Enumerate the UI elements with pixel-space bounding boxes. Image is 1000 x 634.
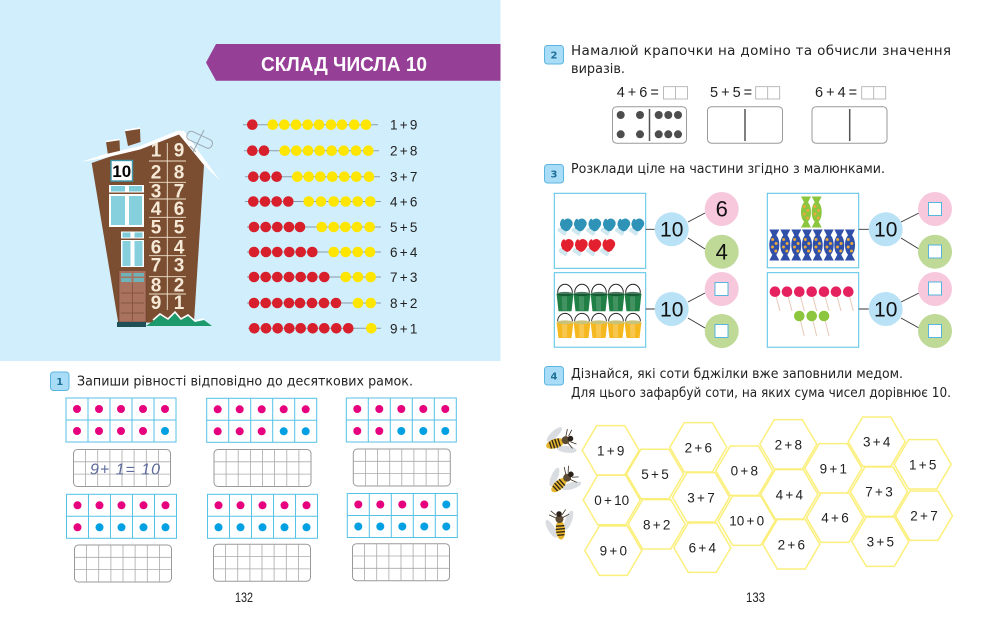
cell 0 + 8 (716, 446, 773, 495)
number pairs on the facade (149, 141, 186, 314)
number pairs on the facade: 5 (174, 218, 185, 238)
cell 2 + 6: 2 + 6 (685, 440, 712, 455)
beads 8 + 2: 8 + 2 (390, 296, 417, 311)
cell 5 + 5 (626, 449, 684, 499)
beads 5 + 5: 5 + 5 (390, 220, 417, 235)
page number left: 132 (235, 589, 253, 605)
cell 3 + 4: 3 + 4 (863, 435, 891, 450)
cell 9 + 1 (805, 444, 862, 493)
equation 4 + 6 (617, 85, 688, 101)
icon: bee 1 (541, 422, 579, 462)
number pairs on the facade: 7 (174, 181, 184, 202)
beads 1 + 9: 1 + 9 (390, 118, 417, 133)
cell 2 + 7: 2 + 7 (910, 509, 938, 524)
beads 3 + 7 (245, 170, 417, 185)
number pairs on the facade: 5 (151, 218, 162, 238)
ten frame: 5 + 5 (208, 494, 318, 538)
cell 4 + 4 (761, 470, 818, 519)
panel: buckets frame (554, 273, 646, 347)
domino: empty 5 + 5 (708, 107, 782, 143)
equation 6 + 4: 6 + 4 = (815, 85, 857, 101)
task 1 text: Запиши рівності відповідно до десяткових рамок. (77, 374, 413, 390)
number pairs on the facade: 7 (151, 256, 161, 277)
bush with snow (146, 312, 212, 326)
answer grid with handwritten equation (74, 450, 170, 486)
number pairs on the facade: 6 (151, 237, 161, 258)
cell 2 + 6 (670, 423, 727, 472)
title: СКЛАД ЧИСЛА 10 (261, 54, 427, 76)
ten frame: 6 + 4 (66, 494, 176, 538)
task 2 text: виразів. (571, 61, 625, 77)
cell 2 + 8: 2 + 8 (775, 437, 802, 452)
task 4 text: Для цього зафарбуй соти, на яких сума чисел дорівнює 10. (571, 385, 951, 401)
beads 2 + 8 (244, 144, 417, 159)
panel: mittens frame (554, 193, 646, 268)
panel: candies frame (767, 193, 859, 268)
answer grid 3 (353, 449, 450, 486)
cell 0 + 10: 0 + 10 (594, 493, 629, 508)
cell 8 + 2: 8 + 2 (643, 517, 670, 532)
beads 7 + 3 (247, 270, 417, 285)
split diagram: buckets (646, 272, 739, 348)
ten frame: 9 + 1 (66, 398, 176, 442)
beads 8 + 2 (247, 296, 417, 311)
badge: task 1 (50, 372, 69, 390)
ten frame: 7 + 3 (346, 398, 456, 442)
beads 1 + 9 (243, 118, 417, 133)
number pairs on the facade: 2 (174, 276, 184, 297)
domino: empty 6 + 4 (812, 107, 887, 143)
panel: lollipops frame (767, 273, 859, 347)
beads 5 + 5 (247, 220, 417, 235)
task 4 text (571, 366, 951, 401)
cell 9 + 0 (585, 526, 642, 575)
number pairs on the facade: 1 (174, 293, 185, 314)
cell 7 + 3: 7 + 3 (865, 485, 893, 500)
equation 6 + 4 (815, 85, 886, 101)
banner: title ribbon (206, 44, 500, 81)
task 4 text: Дізнайся, які соти бджілки вже заповнили медом. (571, 366, 903, 382)
cell 8 + 2 (628, 500, 685, 549)
number pairs on the facade: 3 (174, 256, 184, 277)
cell 9 + 1: 9 + 1 (820, 461, 847, 476)
chimneys (106, 128, 140, 155)
cell 3 + 4 (848, 417, 905, 466)
answer grid with handwritten equation: 9+ 1= 10 (90, 462, 160, 478)
small window (121, 232, 144, 267)
number pairs on the facade: 4 (174, 237, 185, 258)
task 2 text: Намалюй крапочки на доміно та обчисли значення (571, 43, 951, 59)
badge: task 4: 4 (551, 372, 558, 382)
cell 2 + 7 (896, 491, 952, 540)
beads 4 + 6: 4 + 6 (390, 194, 417, 210)
domino: 4 and 6 dots (612, 107, 686, 143)
badge: task 1: 1 (56, 377, 63, 388)
answer grid 5 (214, 544, 310, 581)
ten frame: 8 + 2 (207, 398, 317, 442)
cell 2 + 6 lower (763, 520, 820, 569)
beads 2 + 8: 2 + 8 (390, 144, 417, 159)
cell 7 + 3 (850, 467, 908, 516)
cell 3 + 7 (672, 473, 730, 522)
badge: task 3 (544, 164, 564, 183)
cell 1 + 5 (894, 440, 951, 489)
cell 6 + 4 (674, 523, 731, 572)
equation 4 + 6: 4 + 6 = (617, 85, 659, 101)
badge: task 2 (544, 46, 564, 64)
cell 9 + 0: 9 + 0 (600, 544, 627, 559)
illustration: house of number 10 (82, 128, 220, 327)
equation 5 + 5 (710, 85, 780, 101)
number pairs on the facade: 8 (174, 162, 184, 183)
answer grid 4 (74, 545, 172, 582)
beads 4 + 6 (245, 194, 417, 210)
cell 1 + 9: 1 + 9 (597, 443, 624, 458)
split diagram: buckets: 10 (660, 298, 683, 322)
page number right: 133 (746, 589, 765, 605)
answer grid 6 (352, 544, 450, 581)
number pairs on the facade: 6 (174, 199, 184, 220)
house body (92, 133, 204, 323)
split diagram: 10 = 6 + 4: 4 (716, 240, 728, 264)
cell 1 + 5: 1 + 5 (909, 457, 936, 472)
cell 0 + 8: 0 + 8 (731, 464, 758, 479)
icon: bee 3 (542, 509, 578, 541)
badge: task 2: 2 (551, 50, 558, 62)
split diagram: 10 = 6 + 4: 10 (660, 218, 683, 242)
cell 3 + 7: 3 + 7 (687, 490, 715, 505)
cell 10 + 0: 10 + 0 (729, 514, 764, 529)
split diagram: candies: 10 (874, 218, 897, 242)
cell 5 + 5: 5 + 5 (641, 467, 669, 482)
foundation (117, 322, 146, 327)
door (119, 270, 146, 322)
split diagram: 10 = 6 + 4 (646, 192, 739, 269)
honeycomb of sums (582, 417, 952, 575)
cell 1 + 9 (582, 426, 639, 475)
split diagram: 10 = 6 + 4: 6 (716, 196, 728, 222)
big window (109, 185, 144, 227)
answer grid 2 (214, 450, 311, 486)
house number plate: 10 (112, 162, 131, 181)
cell 4 + 4: 4 + 4 (776, 487, 803, 502)
cell 10 + 0 (718, 496, 775, 545)
cell 0 + 10 (583, 475, 640, 525)
beads 9 + 1: 9 + 1 (390, 321, 417, 336)
number pairs on the facade: 9 (151, 293, 161, 314)
panel: blue header background (0, 0, 500, 361)
cell 4 + 6 (806, 493, 864, 542)
number pairs on the facade: 3 (151, 181, 161, 202)
beads 7 + 3: 7 + 3 (390, 270, 417, 285)
cell 2 + 8 (760, 420, 817, 469)
number pairs on the facade: 8 (151, 276, 161, 297)
cell 4 + 6: 4 + 6 (821, 511, 849, 526)
split diagram: candies (859, 192, 952, 269)
number pairs on the facade: 1 (151, 141, 162, 162)
beads 3 + 7: 3 + 7 (390, 170, 417, 185)
badge: task 4 (544, 366, 564, 385)
antenna (186, 130, 214, 152)
icon: bee 2 (541, 460, 585, 504)
beads 6 + 4: 6 + 4 (390, 245, 418, 260)
cell 6 + 4: 6 + 4 (689, 541, 716, 556)
ten frame: 4 + 6 (347, 494, 457, 538)
equation 5 + 5: 5 + 5 = (710, 85, 752, 101)
cell 3 + 5: 3 + 5 (867, 535, 894, 550)
task 2 text (571, 43, 951, 77)
task 3 text: Розклади ціле на частини згідно з малюнками. (571, 161, 885, 177)
beads 6 + 4 (247, 245, 418, 260)
number pairs on the facade: 2 (151, 162, 161, 183)
beads 9 + 1 (248, 321, 417, 336)
cell 3 + 5 (852, 517, 909, 566)
roof snow (82, 130, 220, 180)
chart: bead rows with sums (243, 118, 418, 336)
number pairs on the facade: 4 (151, 199, 162, 220)
split diagram: lollipops (859, 272, 952, 348)
badge: task 3: 3 (551, 170, 558, 180)
number pairs on the facade: 9 (174, 141, 184, 162)
split diagram: lollipops: 10 (874, 298, 897, 322)
cell 2 + 6 lower: 2 + 6 (778, 537, 805, 552)
